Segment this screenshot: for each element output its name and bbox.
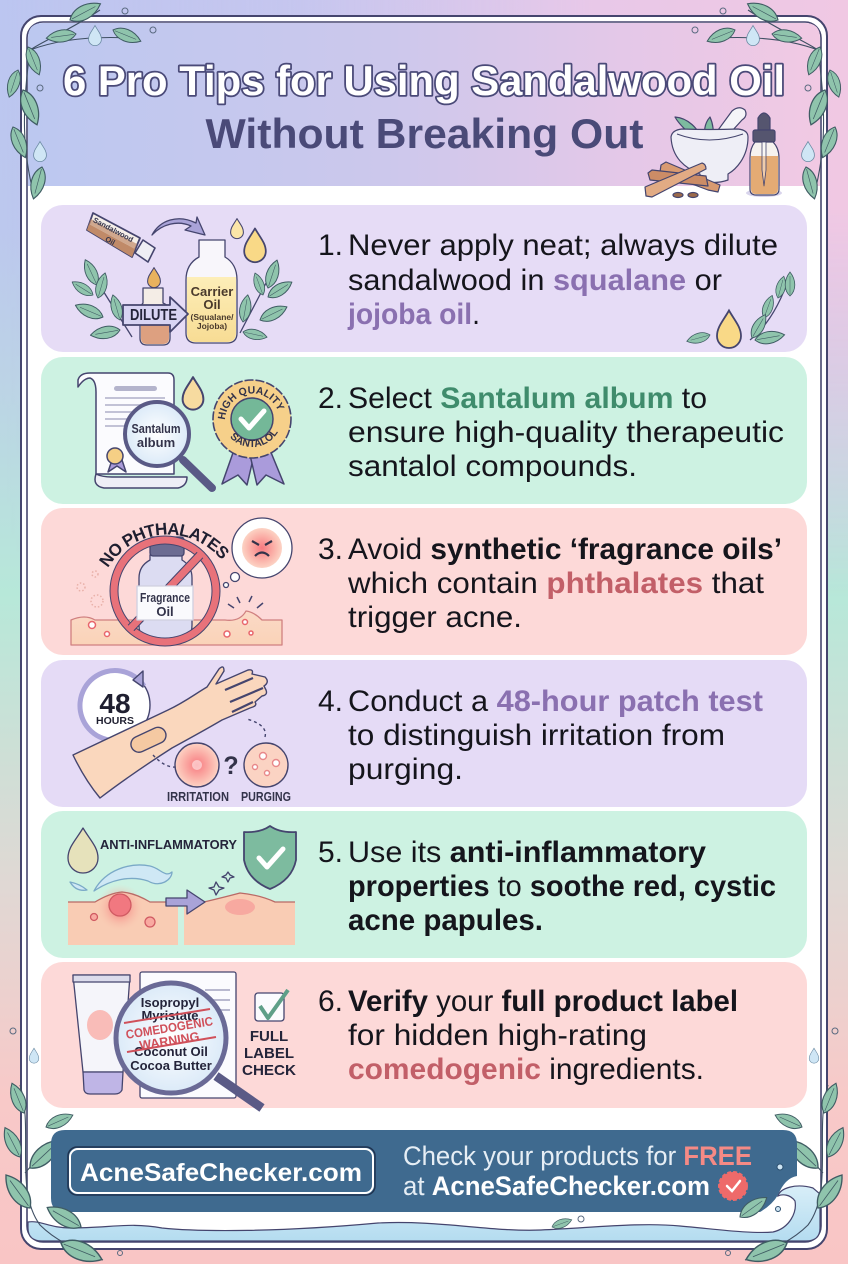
icon: no phthalates fragrance oil: Fragrance <box>140 590 190 605</box>
icon: dilute sandalwood in carrier oil: Oil <box>104 234 117 247</box>
panel: tip 4 <box>41 660 807 807</box>
title <box>63 57 785 157</box>
line 1: Verify your full product label <box>348 985 738 1018</box>
number: 1. <box>318 229 343 262</box>
tip 6 text <box>318 985 738 1086</box>
icon: drop and leaves <box>686 272 795 348</box>
vine: bottom left <box>0 1028 122 1264</box>
line 3: santalol compounds. <box>348 450 637 483</box>
icon: 48 hour patch test <box>73 667 291 804</box>
tip 4 text <box>318 685 763 786</box>
card background <box>41 357 807 504</box>
panel: tip 1 <box>41 205 807 352</box>
line 3: purging. <box>348 753 463 786</box>
line 1: Conduct a 48-hour patch test <box>348 685 763 718</box>
label: CHECK <box>242 1062 296 1079</box>
icon: scroll, magnifier and quality seal: SANTALOL <box>230 431 278 448</box>
icon: dilute sandalwood in carrier oil <box>70 213 295 345</box>
vine: top right <box>692 0 844 201</box>
card background <box>41 660 807 807</box>
call to action line 1: Check your products for FREE <box>403 1141 752 1171</box>
header band <box>28 23 820 186</box>
card background <box>41 811 807 958</box>
icon: scroll, magnifier and quality seal <box>77 372 292 492</box>
icon: no phthalates fragrance oil <box>70 517 293 646</box>
number: 6. <box>318 985 343 1018</box>
line 3: jojoba oil. <box>347 298 480 331</box>
panel: tip 6 <box>41 962 807 1108</box>
line 2: to distinguish irritation from <box>348 719 725 752</box>
tip 3 text <box>318 533 782 634</box>
card background <box>41 962 807 1108</box>
icon: scroll, magnifier and quality seal: HIGH QUALITY <box>218 386 285 420</box>
banner background <box>51 1130 797 1212</box>
water strip and wave <box>28 1186 820 1241</box>
label: oil word: Oil <box>203 297 221 312</box>
card background <box>41 508 807 655</box>
url button <box>68 1147 375 1195</box>
icon: 48 hour patch test: 48 <box>99 688 131 719</box>
line 2: sandalwood in squalane or <box>348 264 722 297</box>
icon: anti-inflammatory soothing skin <box>68 826 296 945</box>
card background <box>41 205 807 352</box>
ingredient: Myristate <box>141 1008 199 1023</box>
label: squalane: (Squalane/ <box>191 312 234 322</box>
icon: product label check <box>73 972 296 1108</box>
panel: tip 5 <box>41 811 807 958</box>
icon: scroll, magnifier and quality seal: album <box>137 435 175 450</box>
icon: verified badge <box>719 1172 747 1200</box>
tip 1 text <box>318 229 778 331</box>
line 3: trigger acne. <box>348 601 522 634</box>
line 1: Select Santalum album to <box>348 382 707 415</box>
tip 2 text <box>318 382 784 483</box>
icon: 48 hour patch test: IRRITATION <box>167 790 229 804</box>
icon: 48 hour patch test: PURGING <box>241 790 291 804</box>
label: FULL <box>250 1028 288 1045</box>
number: 5. <box>318 836 343 869</box>
ingredient: Coconut Oil <box>134 1044 208 1059</box>
vine: bottom right <box>726 1028 848 1264</box>
label: LABEL <box>244 1045 294 1062</box>
url button: AcneSafeChecker.com <box>80 1159 362 1187</box>
label: carrier oil: Carrier <box>191 284 233 299</box>
icon: mortar, sandalwood and dropper bottle <box>645 108 782 198</box>
footer banner <box>51 1130 797 1212</box>
title line 1: 6 Pro Tips for Using Sandalwood Oil <box>63 57 785 104</box>
icon: scroll, magnifier and quality seal: Santalum <box>132 421 180 436</box>
line 3: acne papules. <box>348 904 543 937</box>
ingredient: Isopropyl <box>141 995 199 1010</box>
line 1: Use its anti-inflammatory <box>348 836 706 869</box>
warning line 2: WARNING <box>138 1029 200 1053</box>
ingredient: Cocoa Butter <box>130 1058 212 1073</box>
panel: tip 2 <box>41 357 807 504</box>
icon: no phthalates fragrance oil: Oil <box>156 604 174 619</box>
call to action line 2: at AcneSafeChecker.com <box>403 1171 710 1201</box>
line 1: Avoid synthetic ‘fragrance oils’ <box>348 533 782 566</box>
warning line 1: COMEDOGENIC <box>125 1014 214 1042</box>
line 2: for hidden high-rating <box>348 1019 647 1052</box>
icon: no phthalates fragrance oil: NO PHTHALATES <box>98 522 228 568</box>
icon: anti-inflammatory soothing skin: ANTI-INFLAMMATORY <box>100 837 237 852</box>
vine: top left <box>4 0 156 201</box>
icon: splash droplets and stray leaves <box>43 1164 783 1234</box>
line 3: comedogenic ingredients. <box>348 1053 704 1086</box>
title line 2: Without Breaking Out <box>206 110 644 157</box>
number: 2. <box>318 382 343 415</box>
number: 3. <box>318 533 343 566</box>
line 2: properties to soothe red, cystic <box>348 870 776 903</box>
icon: dilute sandalwood in carrier oil: DILUTE <box>130 307 177 324</box>
icon: 48 hour patch test: ? <box>223 752 239 780</box>
line 2: ensure high-quality therapeutic <box>348 416 784 449</box>
tip 5 text <box>318 836 776 937</box>
panel: tip 3 <box>41 508 807 655</box>
icon: 48 hour patch test: HOURS <box>96 715 134 727</box>
icon: dilute sandalwood in carrier oil: Sandalwood <box>92 215 135 244</box>
label: jojoba: Jojoba) <box>197 321 227 331</box>
line 1: Never apply neat; always dilute <box>348 229 778 262</box>
line 2: which contain phthalates that <box>347 567 765 600</box>
number: 4. <box>318 685 343 718</box>
